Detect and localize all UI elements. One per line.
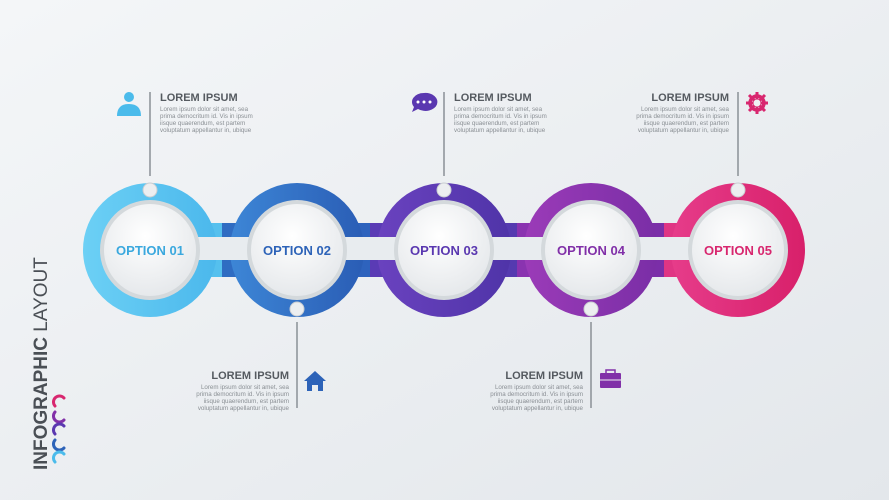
text block 3: voluptatum appellantur in, ubique: [454, 127, 546, 134]
text block 4: [490, 370, 584, 412]
text block 4: prima democritum id. Vis in ipsum: [490, 391, 583, 398]
text block 1: Lorem ipsum dolor sit amet, sea: [160, 106, 249, 113]
text block 5: prima democritum id. Vis in ipsum: [636, 113, 729, 120]
text block 3: [454, 92, 547, 134]
circle: option 01: [83, 183, 220, 317]
circle: option 01: OPTION 01: [116, 243, 184, 258]
circle: option 03: OPTION 03: [410, 243, 478, 258]
text block 4: LOREM IPSUM: [505, 370, 583, 382]
connector bars: [150, 223, 742, 277]
text block 1: prima democritum id. Vis in ipsum: [160, 113, 253, 120]
decorative waves: [53, 396, 64, 462]
circle: option 04: OPTION 04: [557, 243, 626, 258]
circle: option 02: [230, 183, 364, 317]
text block 4: Lorem ipsum dolor sit amet, sea: [495, 384, 584, 391]
text block 3: Lorem ipsum dolor sit amet, sea: [454, 106, 543, 113]
circle: option 05: OPTION 05: [704, 243, 772, 258]
vertical title: INFOGRAPHIC LAYOUT: [31, 257, 52, 470]
text block 5: [636, 92, 730, 134]
text block 2: voluptatum appellantur in, ubique: [198, 405, 290, 412]
text block 2: iisque quaerendum, est partem: [204, 398, 289, 405]
text block 1: [160, 92, 253, 134]
icon: briefcase: [600, 370, 621, 388]
text block 1: iisque quaerendum, est partem: [160, 120, 245, 127]
text block 3: prima democritum id. Vis in ipsum: [454, 113, 547, 120]
icon: chat: [412, 93, 437, 112]
text block 4: voluptatum appellantur in, ubique: [492, 405, 584, 412]
text block 5: voluptatum appellantur in, ubique: [638, 127, 730, 134]
knobs and lines: [150, 92, 738, 408]
text block 1: voluptatum appellantur in, ubique: [160, 127, 252, 134]
icon: gear: [746, 92, 768, 114]
text block 2: prima democritum id. Vis in ipsum: [196, 391, 289, 398]
circle: option 04: [524, 183, 658, 317]
text block 3: LOREM IPSUM: [454, 92, 532, 104]
text block 1: LOREM IPSUM: [160, 92, 238, 104]
circle: option 05: [671, 183, 805, 317]
text block 4: iisque quaerendum, est partem: [498, 398, 583, 405]
circle: option 03: [377, 183, 511, 317]
text block 3: iisque quaerendum, est partem: [454, 120, 539, 127]
icon: home: [304, 371, 326, 391]
circle: option 02: OPTION 02: [263, 243, 331, 258]
text block 5: Lorem ipsum dolor sit amet, sea: [641, 106, 730, 113]
text block 2: [196, 370, 290, 412]
text block 2: LOREM IPSUM: [211, 370, 289, 382]
text block 2: Lorem ipsum dolor sit amet, sea: [201, 384, 290, 391]
icon: user: [117, 92, 141, 116]
text block 5: iisque quaerendum, est partem: [644, 120, 729, 127]
text block 5: LOREM IPSUM: [651, 92, 729, 104]
